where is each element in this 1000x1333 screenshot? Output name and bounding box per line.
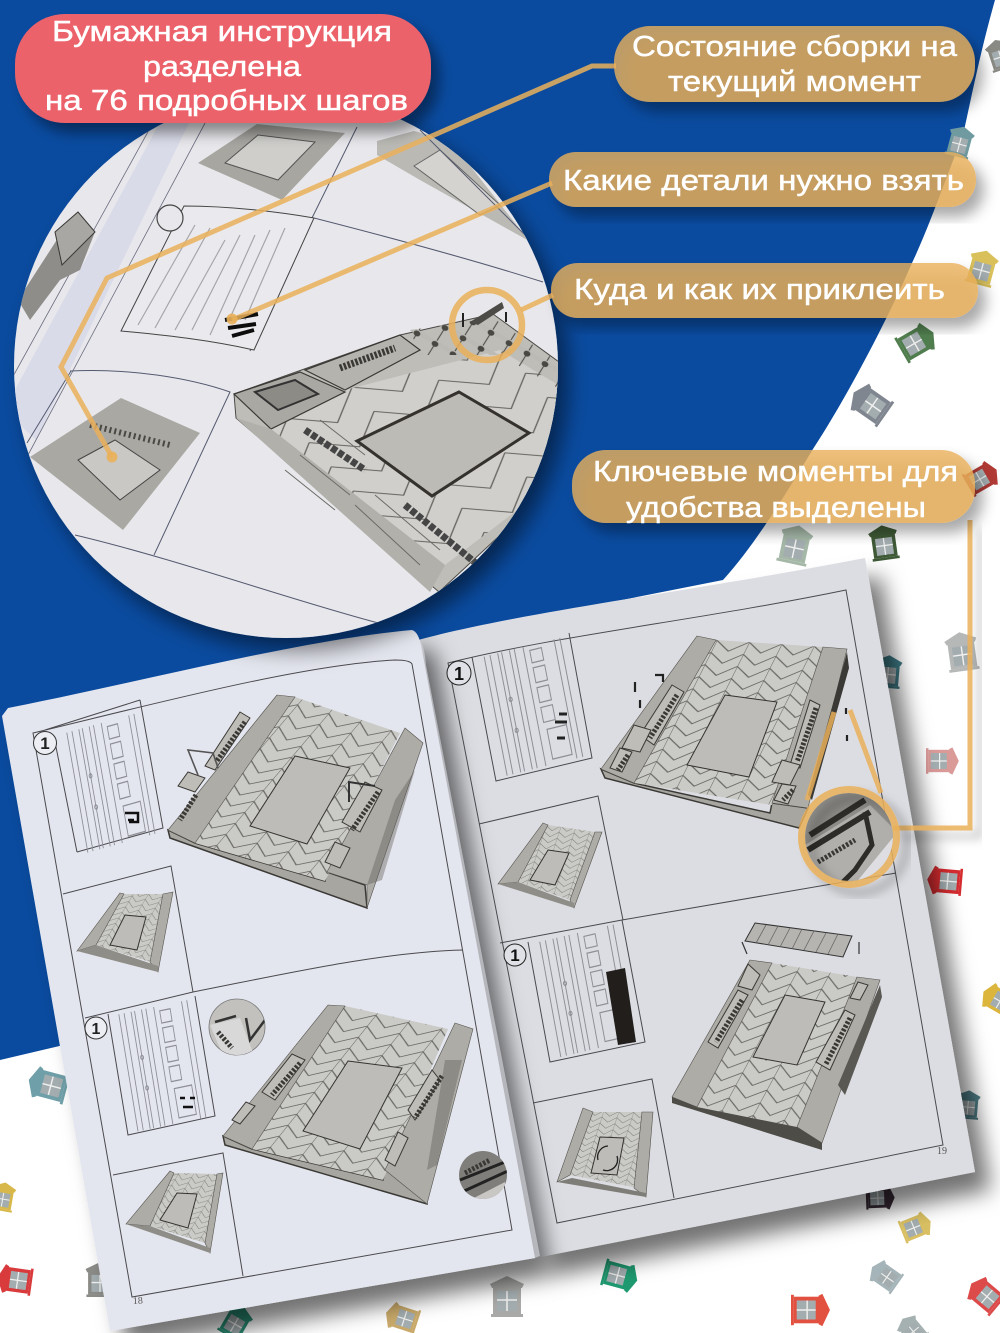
callout: where to glue: [551, 263, 978, 318]
left page: [2, 630, 535, 1331]
gutter strip: [15, 123, 188, 440]
right page frame lines: [448, 590, 943, 1223]
gold ring around close-up: [802, 790, 896, 884]
tray model: left page small top: [77, 892, 173, 972]
callout: assembly state: текущий момент: [668, 66, 921, 98]
callout: 76 steps: [15, 14, 431, 123]
upper right tray: [377, 131, 529, 241]
connector: key moments to inset: [893, 520, 970, 828]
blue background shape: [0, 0, 995, 1060]
callout: parts to take: [549, 152, 976, 207]
tray model: left page small lower: [126, 1171, 223, 1253]
magnifier: left page upper inset: [209, 999, 265, 1060]
booklet: [2, 558, 975, 1331]
number badge step 22: 1: [92, 1021, 101, 1038]
page number 18: 18: [133, 1295, 143, 1307]
right page parts sheets: [484, 638, 636, 1057]
left page frame lines: [33, 660, 512, 1297]
number badge step 24: 1: [510, 946, 520, 965]
number badge step 21: [34, 732, 56, 754]
zoom circle: [0, 94, 570, 638]
callout: 76 steps: разделена: [143, 51, 302, 83]
leader: parts to take: [226, 183, 552, 324]
left page parts sheets: [67, 714, 206, 1131]
tray model: left page top: [168, 695, 423, 908]
magnifier: left page lower inset: [459, 1151, 510, 1200]
upper thumbnail tray: [198, 124, 345, 200]
black strip on parts sheet: [606, 968, 636, 1045]
spine shade: [420, 640, 540, 1258]
page number 19: 19: [937, 1146, 947, 1157]
callout: 76 steps: на 76 подробных шагов: [45, 85, 408, 117]
top plank above tray: [745, 923, 852, 957]
callout: parts to take: Какие детали нужно взять: [563, 165, 964, 197]
callout: 76 steps: Бумажная инструкция: [52, 16, 392, 48]
booklet shadow and right page: [418, 558, 975, 1258]
callout: where to glue: Куда и как их приклеить: [574, 274, 945, 306]
callout: key moments: удобства выделены: [626, 492, 926, 524]
number badge step 24: [504, 944, 526, 966]
callout: assembly state: Состояние сборки на: [632, 31, 958, 63]
gold ring on close-up: [452, 290, 522, 360]
number badge step 23: 1: [454, 664, 464, 684]
tray model: right page lower: [672, 942, 882, 1150]
number badge step 21: 1: [40, 734, 50, 753]
magnifier: key moment close-up: [805, 793, 893, 881]
leader: assembly state: [61, 66, 616, 462]
lower thumbnail tray: [30, 398, 200, 530]
tray model: right page small top: [498, 823, 602, 908]
number badge step 23: [447, 661, 471, 685]
parts sheet in close-up: [121, 206, 314, 350]
callout: assembly state: [614, 26, 975, 102]
tray model: right page top: [601, 636, 849, 828]
big tray in close-up: [234, 314, 570, 592]
gold pointer lines to close-up: [807, 710, 881, 800]
left page mini tray: [21, 232, 95, 320]
number badge step 22: [85, 1017, 107, 1039]
page lines: [27, 127, 543, 624]
callout: key moments: Ключевые моменты для: [593, 456, 958, 488]
tray model: left page lower: [223, 1005, 473, 1204]
tray model: right page small lower: [557, 1108, 653, 1197]
small part above big tray: [470, 302, 504, 325]
callout: key moments: [572, 450, 975, 524]
leader: where to glue: [521, 295, 553, 310]
